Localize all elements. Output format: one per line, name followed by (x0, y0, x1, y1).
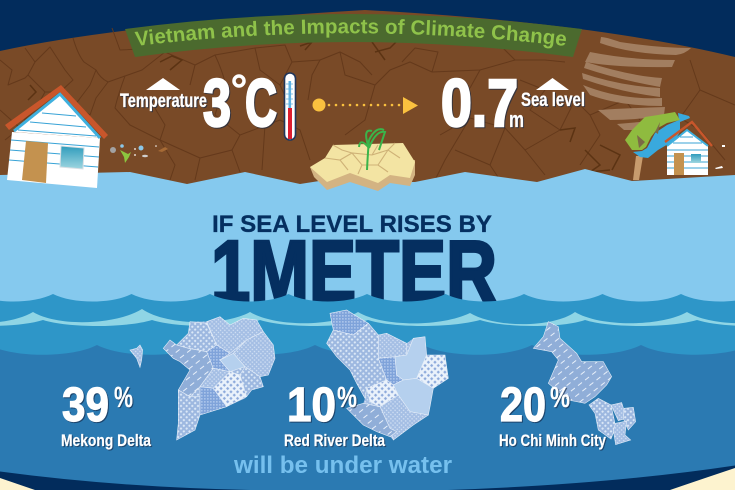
mid water wave (0, 294, 735, 360)
celsius: C (245, 66, 277, 141)
cream corner left (0, 478, 35, 490)
name: Ho Chi Minh City (499, 431, 606, 450)
crack lines (0, 28, 735, 180)
water below pale band (0, 320, 735, 360)
title banner (125, 14, 582, 57)
temperature increase (120, 66, 277, 141)
name: Red River Delta (284, 431, 385, 450)
seedling (359, 129, 385, 170)
temperature label: Temperature (120, 91, 207, 112)
value: 10 (287, 379, 336, 432)
left debris icons (110, 144, 168, 163)
percent: % (337, 382, 357, 414)
deep water (0, 345, 735, 490)
stat: Mekong Delta (61, 379, 151, 450)
cracked earth panel (0, 10, 735, 200)
cream corner right (670, 468, 735, 490)
1 meter headline: 1METER (211, 222, 497, 321)
tree blue foliage (633, 113, 690, 158)
right tree and house (625, 112, 725, 180)
value: 20 (500, 379, 546, 432)
island (130, 345, 143, 367)
arrow (312, 97, 418, 114)
0.7 figure: 0.7 (441, 66, 518, 141)
heading line: IF SEA LEVEL RISES BY (212, 211, 492, 238)
small house (665, 122, 712, 175)
pale wave band (0, 309, 735, 350)
door (22, 141, 48, 183)
metre unit: m (509, 107, 524, 132)
window (60, 146, 84, 169)
stat: Ho Chi Minh City (499, 379, 606, 450)
dark crack clusters (28, 18, 620, 172)
name: Mekong Delta (61, 431, 151, 450)
map: Ho Chi Minh City (533, 322, 636, 445)
roof (5, 85, 108, 139)
percent: % (550, 382, 570, 414)
tree trunk (633, 156, 643, 180)
map: Red River Delta (327, 310, 448, 440)
provinces (163, 317, 275, 440)
water background (0, 169, 735, 320)
thermometer (284, 73, 296, 140)
tree green foliage (625, 112, 680, 150)
left house (5, 85, 108, 188)
3 degrees: 3 (203, 66, 231, 141)
sea level label: Sea level (521, 90, 585, 111)
delta outline (327, 310, 448, 440)
triangle up (536, 78, 569, 90)
cracked plate with seedling (310, 129, 415, 191)
stat: Red River Delta (284, 379, 385, 450)
map: Mekong Delta (130, 317, 275, 440)
value: 39 (62, 379, 109, 432)
triangle up (146, 78, 180, 90)
percent: % (114, 382, 133, 414)
will be under water: will be under water (233, 452, 452, 479)
debris (715, 145, 725, 169)
delta outline (163, 317, 275, 440)
sea level rise (441, 66, 585, 141)
provinces (327, 310, 448, 440)
degree ring (234, 76, 244, 86)
tornado wind bands (582, 37, 691, 130)
title: Vietnam and the Impacts of Climate Change (134, 19, 566, 48)
siding (9, 113, 99, 167)
